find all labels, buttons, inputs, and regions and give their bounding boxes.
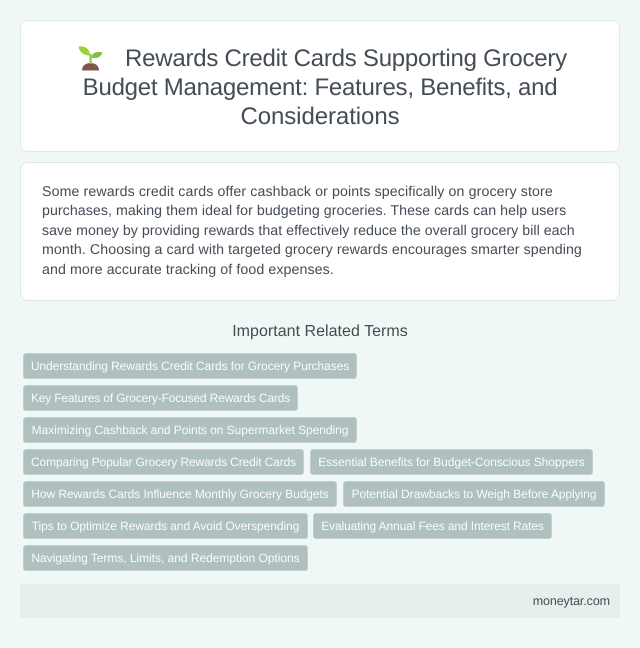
- tag: Comparing Popular Grocery Rewards Credit Cards: [31, 455, 296, 469]
- tag: Key Features of Grocery-Focused Rewards Cards: [31, 391, 290, 405]
- tag: [23, 545, 308, 571]
- tag: [23, 417, 357, 443]
- tag: [23, 353, 357, 379]
- title: Rewards Credit Cards Supporting Grocery: [125, 45, 567, 72]
- tag: [343, 481, 605, 507]
- tag: Understanding Rewards Credit Cards for Grocery Purchases: [31, 359, 349, 373]
- tag: Maximizing Cashback and Points on Supermarket Spending: [32, 423, 348, 437]
- summary text: month. Choosing a card with targeted grocery rewards encourages smarter spending: [42, 242, 582, 258]
- tag: [23, 385, 298, 411]
- tag: [23, 481, 337, 507]
- tag: How Rewards Cards Influence Monthly Grocery Budgets: [31, 487, 329, 501]
- tag: Tips to Optimize Rewards and Avoid Overspending: [32, 519, 299, 533]
- tag: Evaluating Annual Fees and Interest Rates: [321, 519, 544, 533]
- title: Budget Management: Features, Benefits, and: [83, 74, 557, 101]
- summary text: [42, 184, 582, 278]
- icon: seedling: [78, 46, 102, 70]
- summary text: save money by providing rewards that effectively reduce the overall grocery bill each: [42, 223, 575, 239]
- summary text: and more accurate tracking of food expenses.: [42, 262, 334, 278]
- title: Considerations: [240, 103, 400, 130]
- term tags: [23, 353, 605, 571]
- title: [83, 45, 567, 130]
- summary panel: [20, 162, 620, 301]
- tag: Navigating Terms, Limits, and Redemption Options: [31, 551, 300, 565]
- summary text: Some rewards credit cards offer cashback or points specifically on grocery store: [42, 184, 553, 200]
- tag: [313, 513, 552, 539]
- title card: [20, 20, 620, 152]
- tag: [23, 449, 304, 475]
- tag: Potential Drawbacks to Weigh Before Applying: [352, 487, 596, 501]
- footer source: moneytar.com: [533, 594, 610, 608]
- tag: Essential Benefits for Budget-Conscious Shoppers: [318, 455, 585, 469]
- tag: [23, 513, 308, 539]
- summary text: purchases, making them ideal for budgeting groceries. These cards can help users: [42, 203, 566, 219]
- footer bar: [20, 584, 620, 618]
- tag: [310, 449, 593, 475]
- section heading: Important Related Terms: [232, 323, 408, 340]
